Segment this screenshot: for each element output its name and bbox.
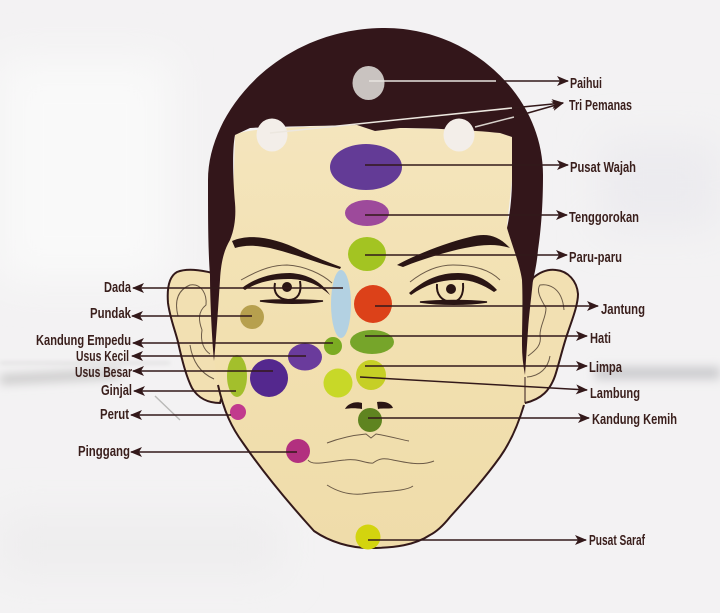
point: Jantung	[354, 285, 392, 323]
arrow: Usus Kecil	[132, 355, 306, 357]
ear: right	[505, 270, 578, 403]
arrow: Perut	[131, 414, 231, 416]
arrow: Kandung Kemih	[368, 417, 589, 419]
label: Usus Kecil: Usus Kecil	[76, 348, 129, 365]
nose	[345, 402, 393, 409]
point: Limpa	[356, 360, 386, 390]
mouth	[308, 434, 434, 494]
eyebrow: right	[397, 235, 510, 267]
labels: left	[36, 279, 132, 460]
arrow: Pundak	[132, 315, 252, 317]
point: Pinggang	[286, 439, 310, 463]
point: Pusat Saraf	[356, 524, 380, 550]
point: Usus Besar	[250, 359, 288, 397]
arrow: Kandung Empedu	[133, 342, 333, 344]
label: Pinggang: Pinggang	[78, 443, 130, 460]
hair	[208, 28, 543, 375]
point: Tri Pemanas right	[444, 118, 474, 152]
point: Tenggorokan	[345, 200, 389, 226]
arrow: Dada	[133, 287, 343, 289]
label: Limpa: Limpa	[589, 359, 622, 376]
arrow: Jantung	[375, 305, 598, 307]
point: Kandung Kemih	[358, 408, 382, 432]
face	[214, 125, 525, 548]
point: Lambung	[324, 368, 352, 398]
arrow: Tri Pemanas	[270, 103, 563, 133]
ear: left	[168, 270, 232, 403]
arrow: Paihui	[369, 80, 568, 82]
arrow: Pusat Saraf	[368, 539, 586, 541]
label: Pusat Wajah: Pusat Wajah	[570, 159, 636, 176]
label: Kandung Kemih: Kandung Kemih	[592, 411, 677, 428]
point: Pusat Wajah	[330, 144, 402, 190]
arrow: Limpa	[365, 365, 587, 367]
point: Paihui	[352, 66, 384, 100]
eyebrow: left	[232, 237, 341, 269]
point: Kandung Empedu	[324, 337, 342, 355]
point: Tri Pemanas left	[256, 118, 288, 152]
arrow: Ginjal	[134, 390, 236, 392]
label: Kandung Empedu: Kandung Empedu	[36, 332, 131, 349]
label: Lambung: Lambung	[590, 385, 640, 402]
leader lines	[131, 81, 598, 540]
label: Tenggorokan: Tenggorokan	[569, 209, 639, 226]
point: Ginjal	[227, 355, 247, 397]
labels: right	[569, 75, 677, 549]
point: Paru-paru	[348, 237, 386, 271]
label: Paru-paru: Paru-paru	[569, 249, 622, 266]
arrow: Lambung	[360, 377, 587, 390]
label: Usus Besar: Usus Besar	[75, 364, 132, 381]
label: Tri Pemanas: Tri Pemanas	[569, 97, 632, 114]
label: Hati: Hati	[590, 330, 611, 347]
arrow: Tenggorokan	[365, 214, 567, 216]
label: Pundak: Pundak	[90, 305, 131, 322]
point: Usus Kecil	[288, 344, 322, 370]
label: Dada: Dada	[104, 279, 131, 296]
arrow: Pusat Wajah	[365, 164, 568, 166]
eye: right	[409, 265, 500, 304]
arrow: Usus Besar	[133, 370, 273, 372]
point: Hati	[350, 330, 394, 354]
arrow: Pinggang	[131, 451, 297, 453]
arrow: Hati	[365, 335, 587, 337]
eye: left	[241, 265, 332, 303]
point: Pundak	[240, 305, 264, 329]
label: Paihui: Paihui	[570, 75, 602, 92]
point: Perut	[230, 404, 246, 420]
ear inner lines	[176, 285, 564, 379]
label: Ginjal: Ginjal	[101, 382, 132, 399]
label: Perut: Perut	[100, 406, 129, 423]
point: Dada	[331, 270, 351, 338]
points	[227, 66, 474, 550]
label: Pusat Saraf: Pusat Saraf	[589, 532, 646, 549]
arrow: Paru-paru	[365, 254, 567, 256]
label: Jantung: Jantung	[601, 301, 645, 318]
